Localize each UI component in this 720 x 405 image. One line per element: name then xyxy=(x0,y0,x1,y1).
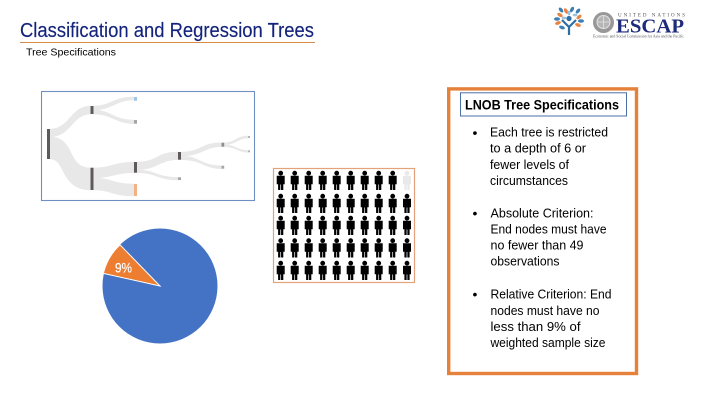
bullet: absolute criterion xyxy=(472,205,607,268)
logo: UN ESCAP xyxy=(554,6,685,38)
pie slice: 9% xyxy=(103,245,160,286)
bullet: relative criterion: weighted sample size xyxy=(490,336,606,350)
panel: people grid xyxy=(274,168,414,282)
title underline xyxy=(20,42,315,44)
subtitle: Tree Specifications xyxy=(26,47,116,59)
title: Classification and Regression Trees xyxy=(20,20,314,42)
pie label: 9% xyxy=(115,261,132,276)
panel: LNOB tree specifications xyxy=(449,89,636,374)
panel: decision tree diagram xyxy=(42,92,254,200)
bullet: absolute criterion: no fewer than 49 xyxy=(490,238,584,252)
panel heading: LNOB Tree Specifications xyxy=(465,97,619,112)
bullet: depth: Each tree is restricted xyxy=(490,126,608,140)
logo text: ESCAP: ESCAP xyxy=(616,15,684,37)
bullet: absolute criterion: observations xyxy=(490,254,560,268)
bullet: relative criterion: less than 9% of xyxy=(490,320,581,334)
bullet: relative criterion: Relative Criterion: End xyxy=(490,287,612,301)
people icons xyxy=(277,171,411,280)
tree flows xyxy=(50,97,248,196)
bullet: depth: • xyxy=(472,124,478,140)
bullet: relative criterion xyxy=(472,286,612,350)
bullet: relative criterion: • xyxy=(472,286,478,302)
tree nodes xyxy=(47,97,250,196)
panel heading xyxy=(460,93,626,116)
icon: logo tree xyxy=(554,6,584,35)
bullet: depth xyxy=(472,124,608,188)
bullet: relative criterion: nodes must have no xyxy=(490,304,600,318)
bullet: depth: to a depth of 6 or xyxy=(490,142,586,156)
bullet: absolute criterion: End nodes must have xyxy=(490,222,607,236)
icon: UN emblem xyxy=(593,12,614,33)
bullet: absolute criterion: Absolute Criterion: xyxy=(490,206,594,220)
bullet: depth: circumstances xyxy=(490,174,568,188)
logo text: United Nations: UNITED NATIONS xyxy=(618,14,685,19)
logo text: tagline: Economic and Social Commission for Asia and the Pacific xyxy=(593,34,684,38)
bullet: absolute criterion: • xyxy=(472,205,478,221)
pie chart xyxy=(102,228,218,344)
bullet: depth: fewer levels of xyxy=(490,158,570,172)
